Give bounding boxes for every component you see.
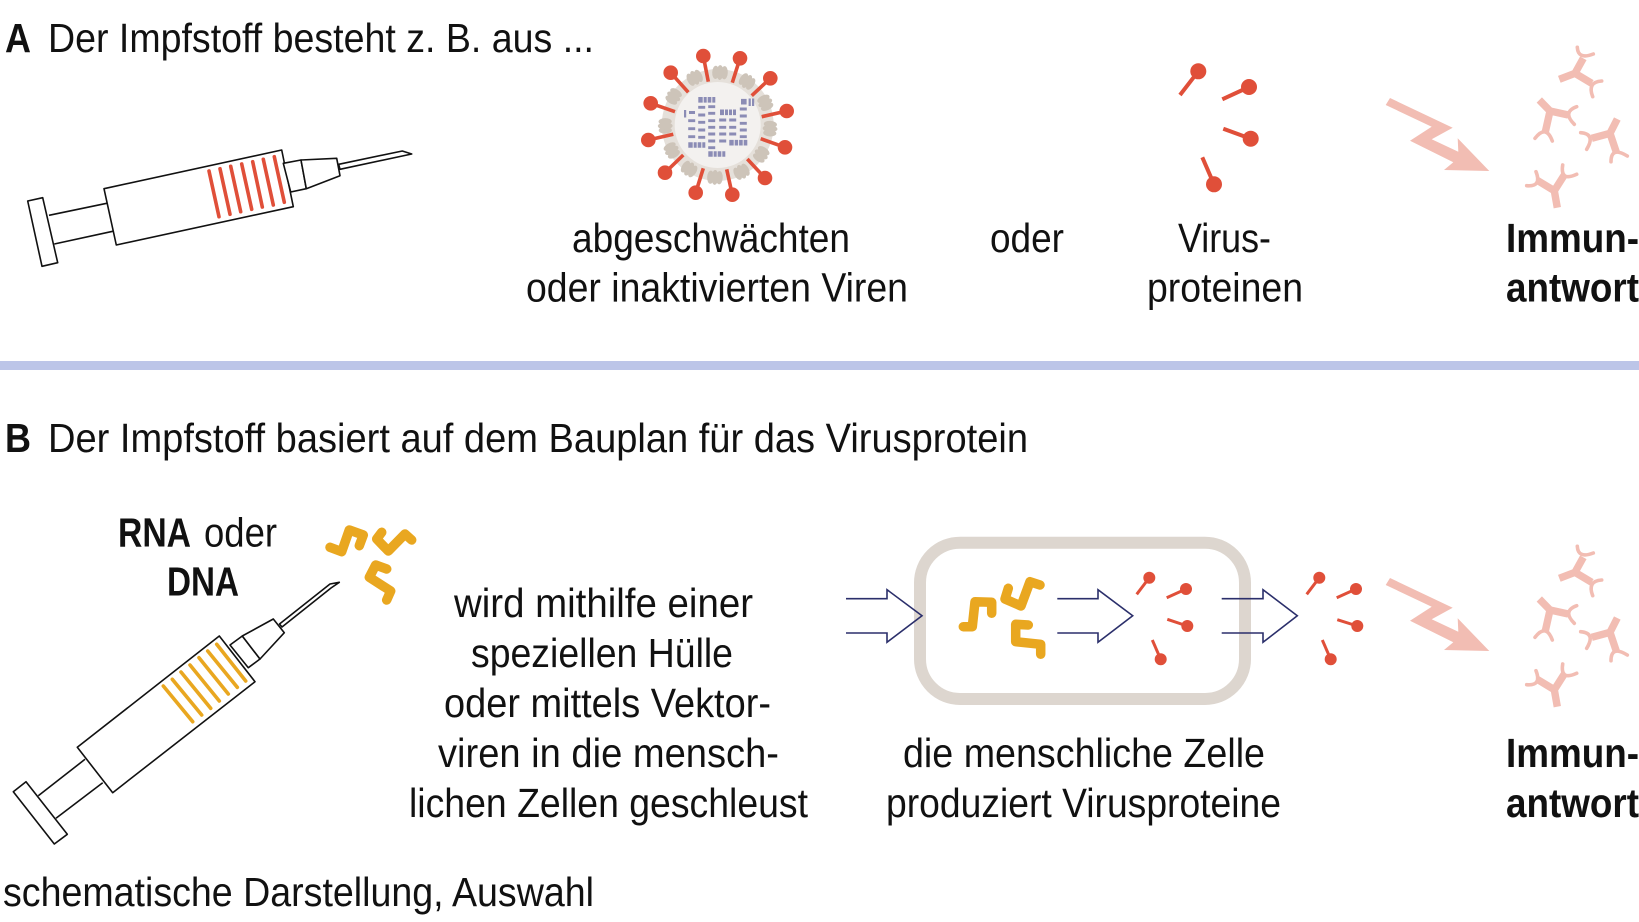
arrow: production in cell bbox=[1057, 590, 1133, 642]
footnote: schematische Darstellung, Auswahl bbox=[3, 869, 594, 915]
text: delivery description bbox=[409, 580, 809, 826]
label: weakened or inactivated viruses: abgeschwächten bbox=[572, 215, 850, 261]
label: cell produces proteins bbox=[886, 730, 1281, 826]
human cell outline bbox=[920, 543, 1245, 699]
heading B: Der Impfstoff basiert auf dem Bauplan für das Virusprotein bbox=[48, 415, 1028, 461]
text: delivery description: viren in die mensch- bbox=[438, 730, 779, 776]
text: delivery description: oder mittels Vektor- bbox=[444, 680, 771, 726]
icon: proteins in cell bbox=[1137, 572, 1193, 665]
arrow: lightning bolt B bbox=[1386, 578, 1489, 651]
label: RNA or DNA: RNA bbox=[118, 510, 191, 556]
label: immune response B bbox=[1506, 730, 1639, 826]
icon: antibodies B bbox=[1527, 546, 1627, 707]
label: weakened or inactivated viruses: oder inaktivierten Viren bbox=[526, 264, 908, 310]
label: immune response A bbox=[1506, 215, 1639, 310]
label: RNA or DNA: oder bbox=[204, 510, 277, 556]
label: RNA or DNA bbox=[118, 510, 277, 604]
icon: virus proteins bbox=[1180, 63, 1259, 192]
label: cell produces proteins: produziert Virusproteine bbox=[886, 780, 1281, 826]
panel B: blueprint-based vaccines bbox=[5, 415, 1639, 844]
arrow: into cell bbox=[846, 590, 922, 642]
label: virus proteins: Virus- bbox=[1178, 215, 1271, 261]
label: cell produces proteins: die menschliche Zelle bbox=[903, 730, 1265, 776]
arrow: lightning bolt A bbox=[1386, 98, 1489, 171]
icon: RNA strands in cell bbox=[963, 582, 1041, 654]
label: virus proteins bbox=[1147, 215, 1303, 310]
label: virus proteins: proteinen bbox=[1147, 264, 1303, 310]
text: delivery description: wird mithilfe einer bbox=[453, 580, 753, 626]
heading A: Der Impfstoff besteht z. B. aus ... bbox=[48, 15, 594, 61]
text: delivery description: lichen Zellen geschleust bbox=[409, 780, 809, 826]
arrow: out of cell bbox=[1222, 590, 1297, 642]
text: delivery description: speziellen Hülle bbox=[471, 630, 733, 676]
icon: RNA strands at syringe bbox=[330, 530, 412, 600]
label: RNA or DNA: DNA bbox=[167, 558, 239, 604]
panel letter B: B bbox=[5, 415, 31, 461]
icon: virus particle bbox=[641, 49, 794, 202]
icon: antibodies A bbox=[1527, 47, 1627, 208]
icon: syringe with red vaccine bbox=[28, 150, 412, 266]
label: weakened or inactivated viruses bbox=[526, 215, 908, 310]
panel letter A: A bbox=[5, 15, 31, 61]
panel A: whole virus and protein vaccines bbox=[5, 15, 1639, 310]
icon: released proteins bbox=[1307, 572, 1363, 665]
label: oder: oder bbox=[990, 215, 1064, 261]
icon: syringe with yellow vaccine bbox=[13, 582, 339, 844]
